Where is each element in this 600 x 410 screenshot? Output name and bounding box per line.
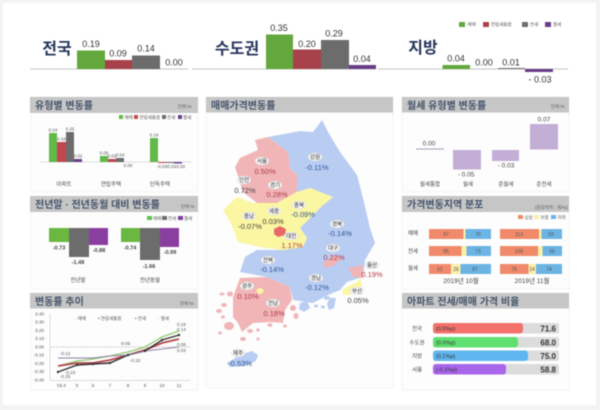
panel: change rate trend: 변동률 추이 <box>35 296 84 308</box>
map labels: 제주 <box>233 349 243 357</box>
stacked bars: distribution: 월세 <box>408 264 418 272</box>
line chart: trend: • 연립세통합 <box>98 315 122 322</box>
line chart: trend: -0.12 <box>60 351 71 356</box>
bar chart: housing types: 0.25 <box>66 126 75 132</box>
line chart: trend: -0.20 <box>34 361 44 366</box>
panel: change rate by housing type: 단독주택 <box>150 180 170 188</box>
summary: capital area: 0.04 <box>353 54 371 64</box>
bar chart: versus same month last year: 전년동월 <box>140 276 160 284</box>
stacked bars: distribution: 113 <box>515 232 523 238</box>
top legend: 연립세통합 <box>491 21 512 28</box>
stacked bars: distribution: 73 <box>475 249 481 255</box>
stacked bars: distribution: 95 <box>443 249 449 255</box>
map labels: 0.05% <box>347 296 369 305</box>
bar chart: rent types: - 0.05 <box>458 172 475 178</box>
panel: change rate by housing type: 단위:% <box>178 103 192 110</box>
top legend: 매매 <box>468 21 476 28</box>
panel: change rate by housing type: 아파트 <box>56 180 72 188</box>
bar chart: housing types: -0.02 <box>175 164 186 169</box>
line chart: trend: · 매매 <box>75 315 86 322</box>
panel: year-to-date and year-on-year change: 매매 <box>153 215 161 222</box>
bar chart: rent types: 월세통합 <box>420 180 440 188</box>
panel: change rate by housing type <box>30 97 198 192</box>
stacked bars: distribution: 76 <box>511 267 517 273</box>
map labels: 경남 <box>311 274 321 282</box>
map labels: 경북 <box>332 221 342 228</box>
bar chart: rent types <box>416 116 558 188</box>
map labels: 충북 <box>294 201 304 209</box>
bar chart: housing types: 0.02 <box>74 154 83 158</box>
stacked bars: distribution: 87 <box>472 267 478 273</box>
bar chart: housing types: 0.24 <box>49 128 58 132</box>
panel: change rate by housing type: 월세 <box>183 114 191 121</box>
map labels: 서울 <box>257 157 267 165</box>
line chart: trend: 0.40 <box>35 312 44 316</box>
summary: national <box>30 39 188 69</box>
map labels: 부산 <box>352 287 362 295</box>
bar chart: versus end of last year: 전년말 <box>70 276 86 284</box>
line chart: trend: -0.23 <box>65 370 76 375</box>
bar chart: rent types: 준월세 <box>498 180 514 188</box>
line chart: trend: 9 <box>144 383 147 388</box>
map labels: 울산 <box>367 261 377 269</box>
bar chart: housing types <box>49 126 186 169</box>
panel: apartment jeonse to sale price ratio <box>402 293 569 390</box>
map labels: 0.22% <box>323 253 345 262</box>
bar chart: rent types: 0.07 <box>538 116 551 124</box>
top legend: 전세 <box>530 21 538 28</box>
map labels: -0.09% <box>291 210 315 219</box>
line chart: trend: • 전세 <box>135 315 146 322</box>
summary: provinces: 0.00 <box>475 58 493 68</box>
line chart: trend: 0.09 <box>177 342 186 347</box>
stacked bars: distribution: 전세 <box>408 247 418 255</box>
summary: national: 0.09 <box>109 48 127 58</box>
top legend <box>459 21 561 28</box>
line chart: trend: 0.14 <box>177 327 186 332</box>
map labels: 강원 <box>310 153 320 161</box>
map labels: 0.18% <box>263 309 285 318</box>
ratio bars: (0.0%p) <box>436 340 455 346</box>
summary: provinces: 0.04 <box>447 54 465 64</box>
map labels: 0.19% <box>361 270 383 279</box>
line chart: trend: -0.40 <box>34 378 44 382</box>
line chart: trend: 11 <box>177 383 182 388</box>
map labels: -0.14% <box>328 229 352 238</box>
bar chart: versus end of last year: -0.88 <box>93 248 105 254</box>
panel: year-to-date and year-on-year change: 월세 <box>184 215 192 222</box>
line chart: trend: 0.03 <box>177 348 186 353</box>
panel: regional distribution of price change: 가격변동지역 분포 <box>407 198 483 211</box>
bar chart: housing types: -0.01 <box>166 164 177 169</box>
stacked bars: distribution: 2019년 10월 <box>443 276 479 285</box>
stacked bars: distribution: 59 <box>548 232 554 238</box>
panel: change rate by housing type: 전세 <box>167 114 175 121</box>
map labels: -0.07% <box>238 222 262 231</box>
line chart: trend: · 월세 <box>158 315 169 322</box>
bar chart: rent types: 0.00 <box>423 140 436 148</box>
ratio bars: (-0.1%p) <box>436 368 457 374</box>
panel: change rate by housing type: 연립주택 <box>101 180 121 188</box>
stacked bars: distribution: 109 <box>515 249 523 255</box>
stacked bars: distribution: 97 <box>443 232 449 238</box>
stacked bars: distribution: 2019년 11월 <box>515 276 550 285</box>
line chart: trend: -0.10 <box>34 353 44 358</box>
map labels: 인천 <box>239 176 249 184</box>
map labels: -0.12% <box>305 283 329 292</box>
panel: year-to-date and year-on-year change: 단위:% <box>181 203 195 210</box>
bar chart: housing types: 0.02 <box>108 154 117 158</box>
map labels: 0.03% <box>262 217 284 226</box>
map labels: 대전 <box>286 232 296 240</box>
bar chart: versus same month last year: -0.74 <box>124 246 137 252</box>
bar chart: rent types: 준전세 <box>536 180 552 188</box>
line chart: trend: -0.10 <box>130 358 141 363</box>
map labels: 전북 <box>263 256 273 264</box>
panel: change rate by housing type: 유형별 변동률 <box>35 99 93 112</box>
panel: regional distribution of price change: 상승 <box>524 214 533 220</box>
ratio bars: (0.1%p) <box>436 354 455 360</box>
bar chart: housing types: -0.03 <box>157 164 168 169</box>
line chart: trend: 5 <box>76 383 79 388</box>
stacked bars: distribution: 76 <box>475 232 481 238</box>
stacked bars: distribution: 61 <box>437 267 443 273</box>
map labels: 광주 <box>242 283 252 290</box>
bar chart: rent types: - 0.03 <box>498 162 515 170</box>
line chart: trend: '19.4 <box>56 383 66 388</box>
ratio bars: 71.6 <box>540 324 557 334</box>
panel: regional distribution of price change: 보합 <box>540 214 549 220</box>
bar chart: versus same month last year: -0.99 <box>164 250 176 256</box>
map labels: 경기 <box>270 181 280 189</box>
summary: national: 0.00 <box>165 58 183 68</box>
stacked bars: distribution: 매매 <box>408 229 418 237</box>
panel: monthly rent change by type <box>402 97 569 192</box>
summary: national: 0.19 <box>82 39 100 49</box>
map labels: 충남 <box>244 212 254 220</box>
top legend: 월세 <box>553 21 561 28</box>
line chart: trend: -0.25 <box>60 374 71 379</box>
stacked bars: distribution: 56 <box>549 249 555 255</box>
ratio bars: 58.8 <box>540 366 557 374</box>
summary: capital area: 0.35 <box>270 23 288 33</box>
summary: provinces: - 0.03 <box>528 74 552 84</box>
map labels: 0.50% <box>254 167 276 176</box>
line chart: trend: 0.20 <box>35 328 44 333</box>
bar chart: versus end of last year: -0.73 <box>53 246 65 252</box>
line chart: trend: 0.00 <box>35 344 44 350</box>
summary: national: 전국 <box>42 40 72 58</box>
line chart: trend: 0.30 <box>35 320 44 325</box>
line chart: trend: -0.30 <box>34 369 44 374</box>
panel: sale price change map: 매매가격변동률 <box>211 99 275 112</box>
map labels: 0.72% <box>234 186 256 195</box>
line chart: trend <box>34 312 190 388</box>
line chart: trend: 7 <box>109 383 112 388</box>
panel: change rate by housing type: 매매 <box>124 114 133 121</box>
ratio bars: 지방 <box>412 352 422 360</box>
bar chart: rent types: 월세 <box>463 180 473 188</box>
summary: provinces: 0.01 <box>502 58 520 68</box>
line chart: trend: 0.19 <box>177 322 186 327</box>
bar chart: housing types: 0.00 <box>124 163 133 168</box>
summary: capital area <box>192 23 376 69</box>
summary: capital area: 0.29 <box>325 28 343 38</box>
ratio bars: (0.0%p) <box>436 326 455 332</box>
map of Korea <box>216 120 375 367</box>
panel: change rate trend <box>30 293 198 390</box>
ratio bars: 서울 <box>412 366 422 374</box>
summary: national: 0.14 <box>137 44 155 54</box>
map labels <box>228 153 383 368</box>
stacked bars: distribution: 74 <box>546 267 552 273</box>
summary: provinces: 지방 <box>408 39 438 57</box>
panel: monthly rent change by type: 단위:% <box>551 103 565 110</box>
map labels: 1.17% <box>281 241 303 250</box>
panel: regional distribution of price change <box>402 196 569 289</box>
summary: provinces <box>378 39 568 84</box>
ratio bars: 수도권 <box>409 338 425 346</box>
panel: sale price change map <box>206 97 393 388</box>
map labels: 0.10% <box>237 292 259 301</box>
stacked bars: distribution <box>408 229 562 285</box>
panel: year-to-date and year-on-year change: 전년말 · 전년동월 대비 변동률 <box>35 198 160 211</box>
line chart: trend: 0.10 <box>35 336 44 341</box>
summary: capital area: 0.20 <box>298 39 316 49</box>
ratio bars: 68.0 <box>540 338 557 348</box>
panel: apartment jeonse to sale price ratio: 아파트 전세/매매 가격 비율 <box>407 295 519 308</box>
panel: regional distribution of price change: 하락 <box>558 214 566 221</box>
map labels: -0.11% <box>305 163 329 172</box>
bar chart: versus end of last year <box>49 228 108 284</box>
ratio bars: 75.0 <box>540 352 557 361</box>
map labels: -0.14% <box>260 265 284 274</box>
bar chart: housing types: 0.05 <box>100 150 109 156</box>
bar chart: housing types: 0.04 <box>116 152 125 158</box>
panel: year-to-date and year-on-year change <box>30 196 198 289</box>
map labels: -0.53% <box>228 359 252 368</box>
bar chart: versus end of last year: -1.48 <box>72 260 84 266</box>
bar chart: housing types: 0.16 <box>57 136 66 142</box>
line chart: trend: 8 <box>127 383 130 388</box>
bar chart: versus same month last year <box>121 228 179 284</box>
panel: regional distribution of price change: (증감지역 : 개/%) <box>535 204 568 211</box>
bar chart: housing types: 0.19 <box>150 132 159 138</box>
bar chart: versus same month last year: -1.66 <box>143 264 155 270</box>
map labels: 0.28% <box>266 190 288 199</box>
panel: monthly rent change by type: 월세 유형별 변동률 <box>407 99 486 112</box>
summary: capital area: 수도권 <box>215 40 259 58</box>
panel: change rate by housing type: 연립세통합 <box>140 114 160 121</box>
ratio bars: 전국 <box>412 324 422 332</box>
map labels: 전남 <box>268 299 278 307</box>
line chart: trend: -0.05 <box>120 341 131 346</box>
map labels: 세종 <box>269 207 279 215</box>
line chart: trend: 6 <box>92 383 95 388</box>
line chart: trend: 10 <box>159 383 165 388</box>
panel: year-to-date and year-on-year change: 전세 <box>168 215 176 222</box>
map labels: 대구 <box>328 244 338 252</box>
stacked bars: distribution: 24 <box>529 267 535 273</box>
stacked bars: distribution: 26 <box>453 267 459 273</box>
panel: change rate trend: 단위:% <box>180 300 194 307</box>
ratio bars <box>409 323 559 374</box>
